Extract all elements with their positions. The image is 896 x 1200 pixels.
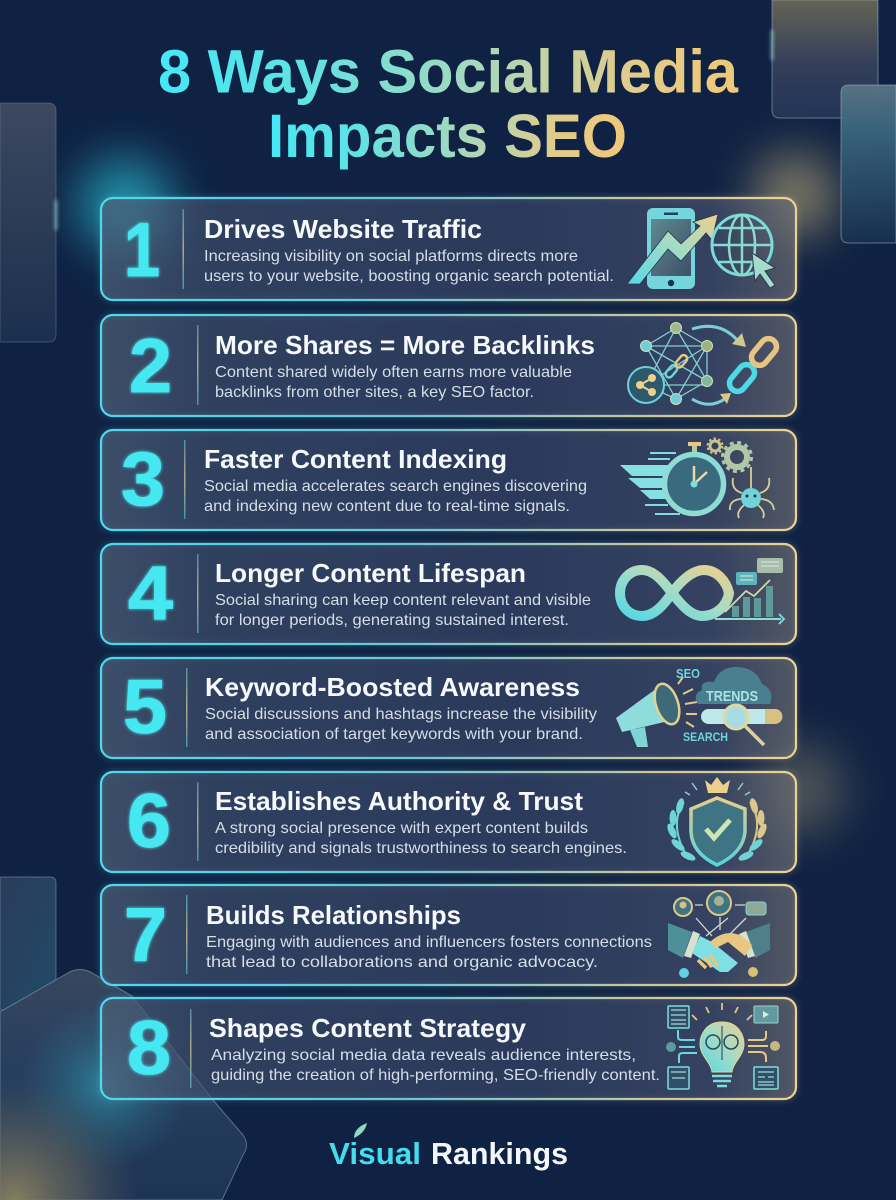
description 6 [215,820,627,857]
description 8: guiding the creation of high-performing, SEO-friendly content. [211,1067,660,1084]
icon: infinity loop with growth chart [620,558,784,624]
heading 6: Establishes Authority & Trust [215,786,583,816]
glass panel left [0,103,56,342]
number 1: 1 [124,208,160,293]
number 5: 5 [123,665,167,750]
icon: leaf [354,1123,367,1138]
panel: 6 Establishes Authority & Trust [101,772,796,872]
icon: megaphone, cloud and search bar: SEO [676,667,700,681]
heading 2: More Shares = More Backlinks [215,330,595,360]
description 8: Analyzing social media data reveals audience interests, [211,1047,636,1064]
icon: link network [628,322,780,404]
icon: stopwatch, gears and spider [620,438,774,518]
description 5: Social discussions and hashtags increase the visibility [205,706,597,723]
icon: megaphone, cloud and search bar: SEARCH [683,732,728,744]
panel: 1 Drives Website Traffic [101,198,796,300]
description 4: Social sharing can keep content relevant and visible [215,592,591,609]
icon: megaphone, cloud and search bar: TRENDS [706,688,758,705]
panel: 7 Builds Relationships [101,885,796,985]
title: Impacts SEO [268,102,627,170]
heading 8: Shapes Content Strategy [209,1013,527,1043]
description 7: Engaging with audiences and influencers fosters connections [206,934,652,951]
description 1: users to your website, boosting organic search potential. [204,268,614,285]
glass panel lower left [0,877,56,1010]
panel: 4 Longer Content Lifespan [101,544,796,644]
description 1: Increasing visibility on social platforms directs more [204,248,578,265]
icon: shield, crown and laurels [665,777,769,865]
heading 5: Keyword-Boosted Awareness [205,672,580,702]
description 2: Content shared widely often earns more valuable [215,364,572,381]
heading 3: Faster Content Indexing [204,444,507,474]
description 5 [205,706,597,743]
description 8 [211,1047,660,1084]
description 3 [204,478,587,515]
glass polygon bottom left [0,970,246,1200]
number 3: 3 [121,437,165,522]
heading 1: Drives Website Traffic [204,214,482,244]
heading 7: Builds Relationships [206,900,461,930]
description 1 [204,248,614,285]
number 4: 4 [128,551,173,636]
description 5: and association of target keywords with your brand. [205,726,583,743]
description 3: Social media accelerates search engines discovering [204,478,587,495]
title [158,38,739,170]
number 7: 7 [124,893,167,978]
description 6: A strong social presence with expert content builds [215,820,588,837]
icon: megaphone, cloud and search bar [616,667,782,747]
logo: Visual Rankings [329,1123,568,1171]
heading 4: Longer Content Lifespan [215,558,526,588]
icon: lightbulb brain with content flows [666,1003,780,1089]
glass panel top right [772,0,878,118]
description 2 [215,364,572,401]
title: 8 Ways Social Media [158,38,739,106]
icon: handshake and people network [668,891,770,978]
panel: 2 More Shares = More Backlinks [101,315,796,416]
panel: 8 Shapes Content Strategy [101,998,796,1099]
description 7 [206,934,652,971]
description 6: credibility and signals trustworthiness to search engines. [215,840,627,857]
logo: Visual Rankings: Rankings [431,1136,568,1171]
number 6: 6 [127,779,171,864]
description 4: for longer periods, generating sustained interest. [215,612,569,629]
description 7: that lead to collaborations and organic advocacy. [206,954,598,971]
glass panel right [841,85,896,243]
icon: phone, growth arrow and globe [627,208,775,289]
number 2: 2 [129,324,172,409]
panel: 5 Keyword-Boosted Awareness [101,658,796,758]
description 3: and indexing new content due to real-time signals. [204,498,570,515]
description 2: backlinks from other sites, a key SEO factor. [215,384,534,401]
panel: 3 Faster Content Indexing [101,430,796,530]
logo: Visual Rankings: Visual [329,1136,421,1171]
number 8: 8 [127,1006,171,1091]
description 4 [215,592,591,629]
